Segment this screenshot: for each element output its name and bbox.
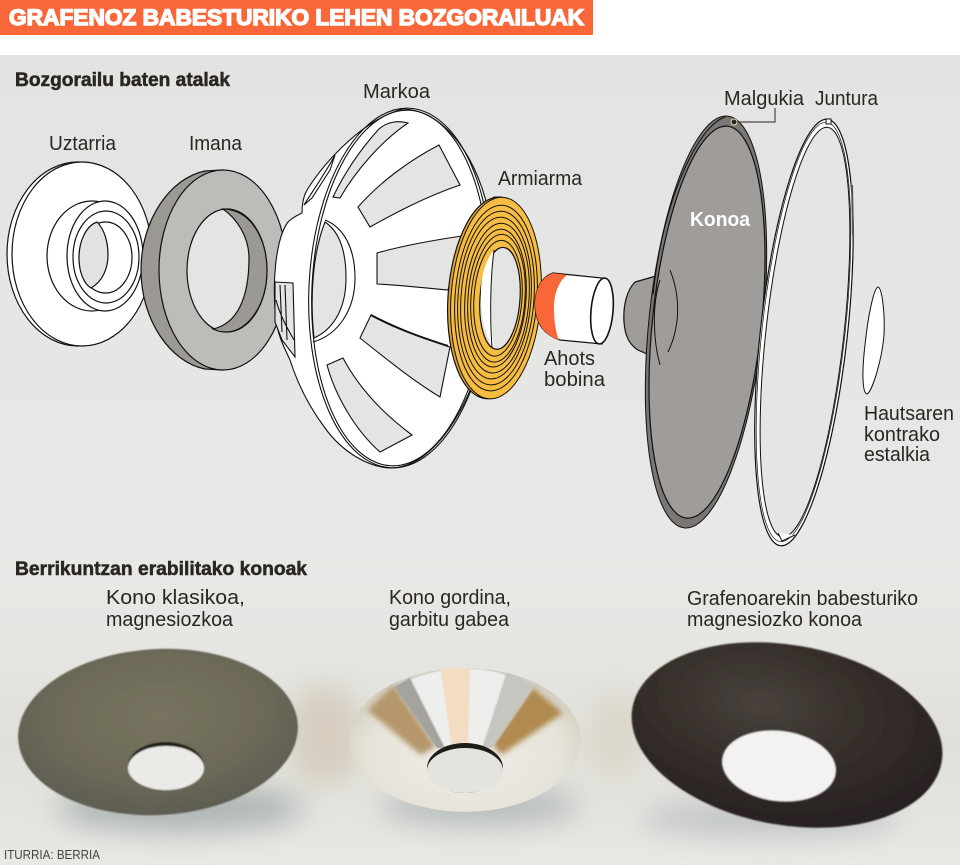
frame side bracket [275,282,295,357]
label: Hautsaren kontrako estalkia: estalkia [864,444,931,466]
frame window 2 [358,145,460,227]
label: Ahots bobina [544,348,606,391]
frame window 1 [333,122,408,198]
label: Ahots bobina: Ahots [544,348,595,370]
frame hub opening [313,220,355,342]
caption: classic cone [106,587,245,631]
part: gasket (Juntura) [737,115,871,550]
cone hub [624,276,656,358]
photo: raw unpolished cone [349,664,581,812]
part: voice coil (Ahots bobina) [535,273,616,345]
photo: classic magnesium cone [14,642,302,822]
frame rim [300,103,500,473]
caption: classic cone: magnesiozkoa [106,609,234,631]
label: Juntura: Juntura [815,88,879,110]
heading: cones used in the innovation: Berrikuntzan erabilitako konoak [15,559,307,580]
caption: classic cone: Kono klasikoa, [106,587,245,609]
label: Hautsaren kontrako estalkia: kontrako [864,424,940,446]
part: spider (Armiarma) [441,194,548,402]
title banner: GRAFENOZ BABESTURIKO LEHEN BOZGORAILUAK [9,5,584,30]
label: Hautsaren kontrako estalkia [864,403,954,466]
caption: graphene cone: magnesiozko konoa [687,609,863,631]
label: Imana: Imana [189,133,243,155]
part: yoke (Uztarria) [7,162,152,346]
caption: raw cone: garbitu gabea [389,609,510,631]
photo: graphene-protected cone [617,619,957,851]
label: Konoa: Konoa [690,209,751,231]
frame window 5 [327,358,412,452]
photo shadows [55,685,900,836]
part: dust cap [863,287,884,394]
label: Uztarria: Uztarria [49,133,117,155]
frame window 4 [360,315,450,397]
label: Armiarma: Armiarma [498,168,583,190]
label: Ahots bobina: bobina [544,369,606,391]
caption: raw cone [389,587,511,631]
part: cone (Konoa) [624,110,784,534]
label: Malgukia with leader line: Malgukia [724,88,805,110]
heading: speaker parts: Bozgorailu baten atalak [15,70,230,91]
frame window 3 [377,236,462,290]
caption: graphene cone [687,588,918,631]
title banner [0,0,593,35]
label: Markoa: Markoa [363,81,431,103]
label: Malgukia with leader line [724,88,805,125]
part: magnet (Imana) [141,170,287,370]
label: Hautsaren kontrako estalkia: Hautsaren [864,403,954,425]
part: frame (Markoa) [274,103,500,473]
source: ITURRIA: BERRIA [4,848,101,862]
caption: raw cone: Kono gordina, [389,587,511,609]
caption: graphene cone: Grafenoarekin babesturiko [687,588,918,610]
